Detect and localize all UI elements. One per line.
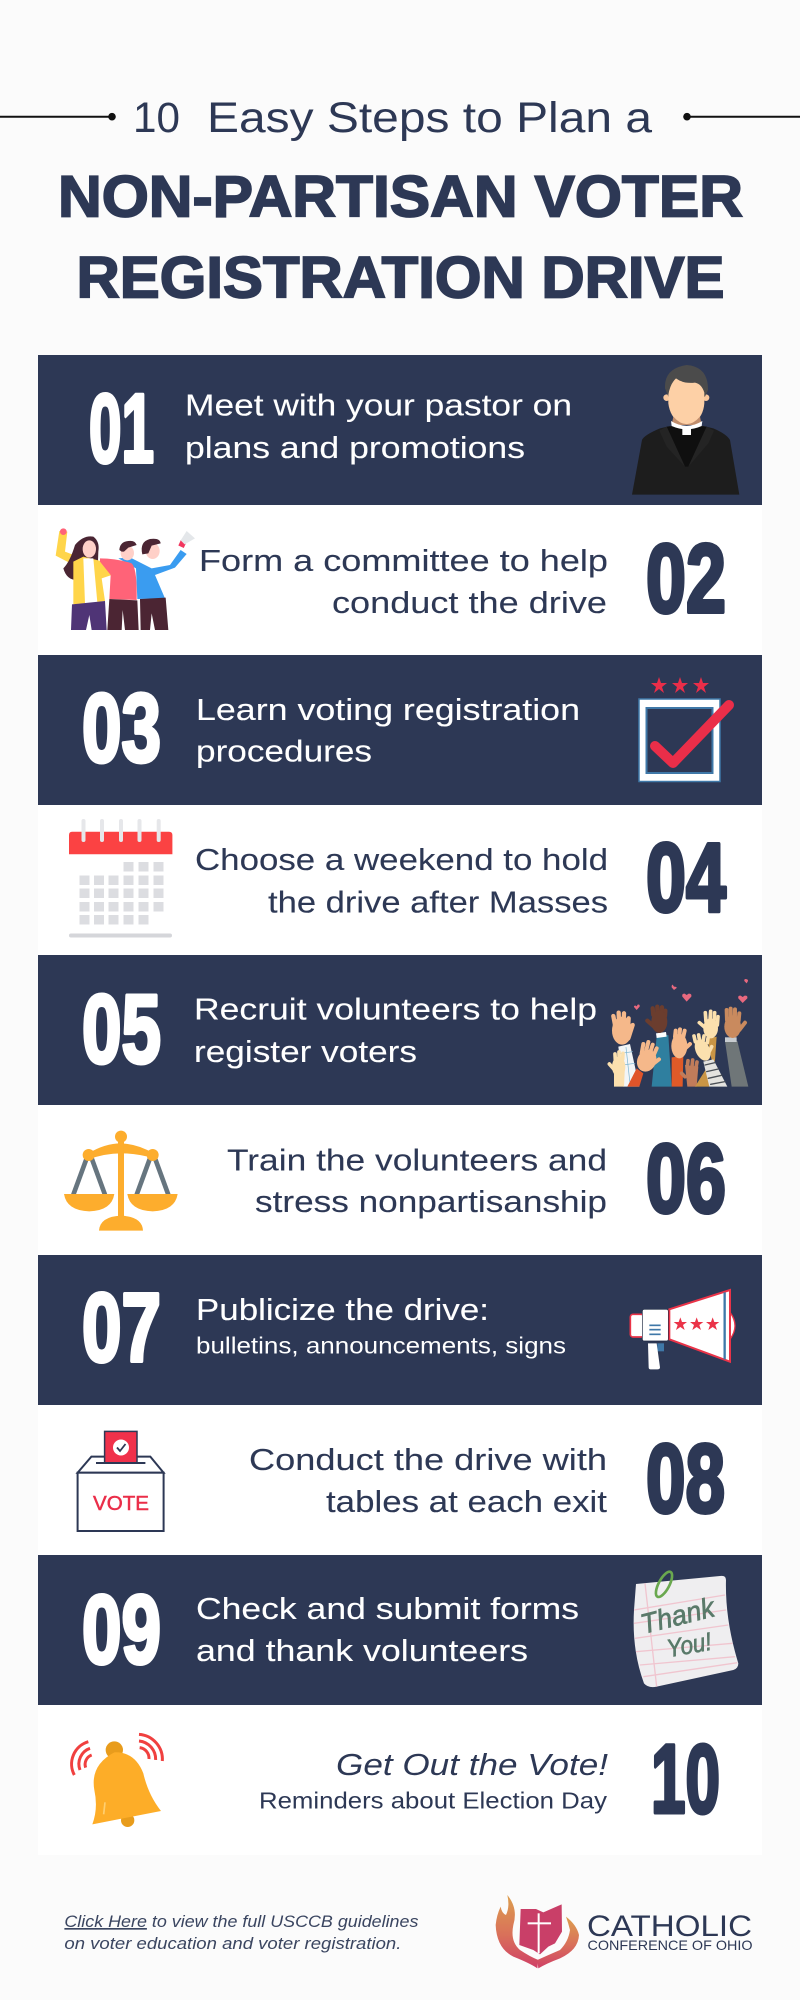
main title [58,164,743,310]
icon: thank you note: Thank [637,1591,719,1640]
text step 07: Publicize the drive: [196,1292,489,1327]
subtitle rule right [683,113,800,120]
text step 03 [196,692,580,769]
text step 05: Recruit volunteers to help [194,992,597,1027]
panel: step 10 [38,1705,762,1855]
logo wordmark [587,1910,753,1953]
panel: step 06 [38,1105,762,1255]
icon: checkbox with stars [639,677,729,782]
number 03: 03 [82,674,161,782]
icon: raised hands [609,979,748,1087]
text step 09: and thank volunteers [196,1633,528,1668]
text step 04 [195,842,608,920]
text step 06: stress nonpartisanship [255,1184,607,1219]
text step 04: the drive after Masses [268,884,608,920]
icon: thank you note [634,1569,738,1687]
number 09: 09 [82,1575,161,1684]
icon: ballot box: VOTE [93,1492,149,1515]
number 07: 07 [82,1273,161,1382]
text step 08 [249,1442,607,1519]
text step 10: Get Out the Vote! [336,1747,608,1782]
text step 04: Choose a weekend to hold [195,842,608,877]
text step 05: register voters [194,1034,417,1069]
text step 08: Conduct the drive with [249,1442,607,1477]
number 02: 02 [646,524,726,633]
number 10: 10 [651,1724,720,1834]
text step 06 [227,1143,607,1219]
text step 05 [194,992,597,1069]
text step 10: Reminders about Election Day [259,1788,608,1814]
icon: megaphone [630,1290,735,1369]
header: title block [0,94,800,310]
text step 09 [196,1591,579,1668]
subtitle: Easy Steps to Plan a [207,94,652,142]
icon: thank you note: You! [665,1628,714,1663]
logo: Catholic Conference of Ohio [496,1895,753,1968]
icon: calendar [69,821,172,938]
icon: priest [632,365,739,495]
text step 02: Form a committee to help [199,543,608,578]
text step 07 [196,1292,566,1358]
panel: step 07 [38,1255,762,1405]
number 06: 06 [646,1124,726,1233]
panel: step 03 [38,655,762,805]
icon: ballot box [78,1431,164,1531]
main title: REGISTRATION DRIVE [76,246,724,310]
text step 06: Train the volunteers and [227,1143,607,1178]
panel: step 08 [38,1405,762,1555]
text step 03: procedures [196,734,372,769]
text step 10 [259,1747,608,1814]
logo emblem [496,1895,579,1968]
number 01: 01 [89,374,154,483]
footer note: Click Here to view the full USCCB guidelines [64,1913,418,1931]
icon: committee people [56,528,195,630]
text step 01: Meet with your pastor on [185,388,572,423]
text step 03: Learn voting registration [196,692,580,727]
logo wordmark: CONFERENCE OF OHIO [588,1937,753,1953]
icon: scales [64,1131,178,1231]
subtitle: 10 [133,94,180,142]
text step 02: conduct the drive [332,585,607,620]
logo wordmark: CATHOLIC [587,1910,752,1943]
text step 09: Check and submit forms [196,1591,579,1626]
subtitle rule left [0,113,116,120]
text step 07: bulletins, announcements, signs [196,1332,566,1358]
text step 02 [199,543,608,620]
panel: step 05 [38,955,762,1105]
panel: step 01 [38,355,762,505]
text step 08: tables at each exit [326,1484,607,1519]
main title: NON-PARTISAN VOTER [58,164,743,230]
panel: step 02 [38,505,762,655]
number 08: 08 [646,1424,725,1533]
icon: ringing bell [72,1734,162,1827]
text step 01 [185,388,572,465]
text step 01: plans and promotions [185,430,525,465]
footer note [64,1913,418,1953]
number 04: 04 [646,823,726,932]
number 05: 05 [82,974,161,1084]
footer note: on voter education and voter registration. [64,1935,401,1953]
panel: step 09 [38,1555,762,1705]
panel: step 04 [38,805,762,955]
